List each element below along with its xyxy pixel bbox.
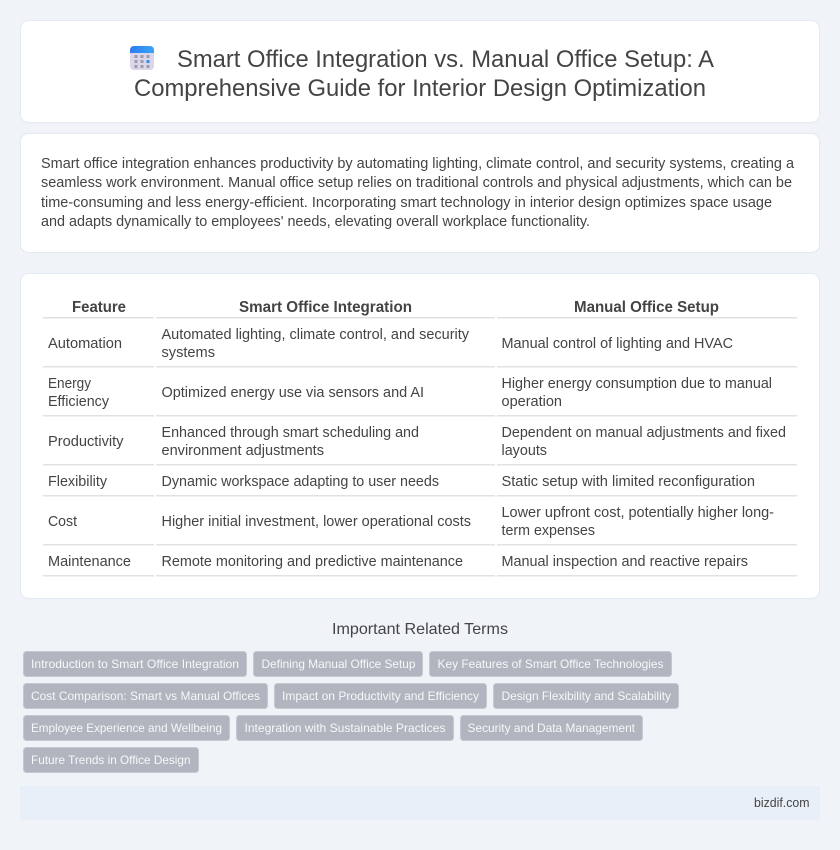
tag: Cost Comparison: Smart vs Manual Offices xyxy=(24,684,268,708)
table header row: Manual Office Setup xyxy=(574,299,719,316)
table row: Flexibility: Flexibility xyxy=(48,474,108,490)
table row: Maintenance: Manual inspection and reactive repairs xyxy=(502,554,748,570)
tag: Security and Data Management: Security and Data Management xyxy=(468,721,636,735)
tag: Key Features of Smart Office Technologies: Key Features of Smart Office Technologies xyxy=(438,657,664,671)
table header row: Feature xyxy=(72,299,126,316)
tag: Introduction to Smart Office Integration xyxy=(24,652,246,676)
text block: introduction paragraph: Smart office integration enhances productivity by automating lighting, climate control, and security systems, creating a xyxy=(41,156,794,172)
related terms tags xyxy=(24,652,678,772)
tag: Future Trends in Office Design: Future Trends in Office Design xyxy=(31,753,190,767)
table row: Maintenance xyxy=(43,554,797,576)
title: Comprehensive Guide for Interior Design Optimization xyxy=(134,75,706,102)
table row: Energy Efficiency: Optimized energy use via sensors and AI xyxy=(162,385,424,401)
tag: Security and Data Management xyxy=(460,716,642,740)
tag: Defining Manual Office Setup: Defining Manual Office Setup xyxy=(262,657,416,671)
table row: Automation: systems xyxy=(162,345,215,361)
tag: Introduction to Smart Office Integration: Introduction to Smart Office Integration xyxy=(31,657,239,671)
table row: Productivity: Dependent on manual adjustments and fixed xyxy=(502,425,786,441)
text block: introduction paragraph: seamless work environment. Manual office setup relies on traditional controls and physical adjustments, which can be xyxy=(41,175,792,191)
table row: Flexibility: Dynamic workspace adapting to user needs xyxy=(162,474,439,490)
table row: Maintenance: Maintenance xyxy=(48,554,131,570)
icon: calendar xyxy=(130,46,154,70)
table row: Flexibility xyxy=(43,474,797,496)
text block: introduction paragraph xyxy=(41,156,794,230)
table row: Productivity: Productivity xyxy=(48,434,124,450)
table header row xyxy=(43,299,797,318)
footer: bizdif.com xyxy=(754,796,810,810)
tag: Employee Experience and Wellbeing: Employee Experience and Wellbeing xyxy=(31,721,222,735)
tag: Impact on Productivity and Efficiency: Impact on Productivity and Efficiency xyxy=(282,689,479,703)
table row: Automation: Automation xyxy=(48,336,122,352)
table row: Cost: Lower upfront cost, potentially higher long- xyxy=(502,505,774,521)
table row: Cost: Higher initial investment, lower operational costs xyxy=(162,514,471,530)
table row: Automation: Automated lighting, climate control, and security xyxy=(162,327,470,343)
panel: page header xyxy=(20,20,820,122)
table row: Automation: Manual control of lighting and HVAC xyxy=(502,336,733,352)
panel: comparison table xyxy=(20,274,820,598)
text block: introduction paragraph: and adapts dynamically to employees' needs, elevating overall workplace functionality. xyxy=(41,214,590,230)
footer xyxy=(20,786,820,820)
tag: Key Features of Smart Office Technologies xyxy=(430,652,672,676)
title xyxy=(134,46,714,102)
tag: Impact on Productivity and Efficiency xyxy=(274,684,486,708)
tag: Future Trends in Office Design xyxy=(24,748,198,772)
table row: Automation xyxy=(43,327,797,368)
table row: Energy Efficiency: Efficiency xyxy=(48,394,110,410)
tag: Design Flexibility and Scalability: Design Flexibility and Scalability xyxy=(502,689,671,703)
title: Smart Office Integration vs. Manual Office Setup: A xyxy=(177,46,714,73)
table row: Productivity xyxy=(43,425,797,466)
table row: Energy Efficiency: Higher energy consumption due to manual xyxy=(502,376,772,392)
tag: Defining Manual Office Setup xyxy=(254,652,422,676)
table row: Productivity: environment adjustments xyxy=(162,443,324,459)
text block: introduction paragraph: time-consuming and less energy-efficient. Incorporating smart technology in interior design optimizes space usage xyxy=(41,195,772,211)
table header row: Smart Office Integration xyxy=(239,299,412,316)
tag: Integration with Sustainable Practices xyxy=(236,716,454,740)
table row: Productivity: layouts xyxy=(502,443,547,459)
heading: Important Related Terms: Important Related Terms xyxy=(332,621,508,638)
table row: Energy Efficiency: operation xyxy=(502,394,562,410)
table row: Productivity: Enhanced through smart scheduling and xyxy=(162,425,419,441)
table row: Maintenance: Remote monitoring and predictive maintenance xyxy=(162,554,463,570)
table row: Energy Efficiency: Energy xyxy=(48,376,92,392)
tag: Integration with Sustainable Practices: Integration with Sustainable Practices xyxy=(244,721,446,735)
tag: Cost Comparison: Smart vs Manual Offices: Cost Comparison: Smart vs Manual Offices xyxy=(31,689,260,703)
table row: Energy Efficiency xyxy=(43,376,797,416)
tag: Employee Experience and Wellbeing xyxy=(24,716,230,740)
table row: Flexibility: Static setup with limited reconfiguration xyxy=(502,474,755,490)
table row: Cost xyxy=(43,505,797,546)
table row: Cost: term expenses xyxy=(502,523,595,539)
table row: Cost: Cost xyxy=(48,514,77,530)
tag: Design Flexibility and Scalability xyxy=(494,684,678,708)
panel: introduction xyxy=(20,134,820,252)
